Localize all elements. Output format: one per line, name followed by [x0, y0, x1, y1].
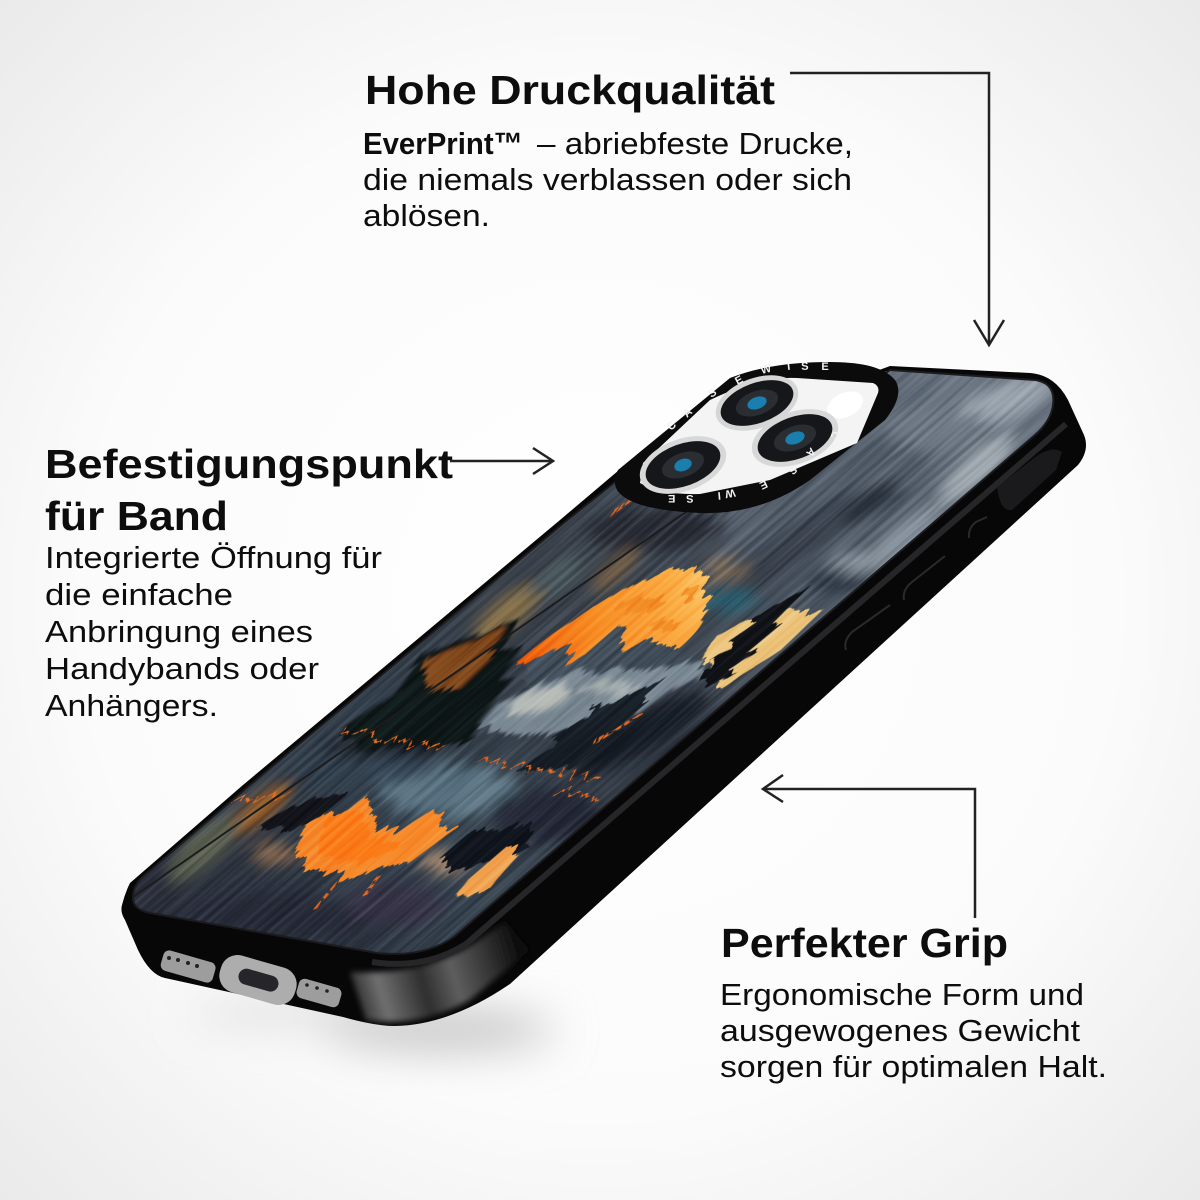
left speaker [159, 949, 217, 984]
heading: Befestigungspunkt für Band: Befestigungspunkt [45, 441, 453, 487]
side action button [969, 517, 987, 538]
glass insert [640, 378, 878, 494]
camera bump [615, 361, 898, 513]
arrow: to top of phone [790, 73, 1004, 345]
description: – abriebfeste Drucke, [537, 126, 853, 161]
heading: Perfekter Grip: Perfekter Grip [721, 920, 1008, 966]
side pad [997, 450, 1062, 510]
screen rim [133, 370, 1053, 954]
description: ausgewogenes Gewicht [720, 1013, 1080, 1048]
description [363, 126, 853, 233]
right speaker [295, 977, 343, 1009]
lens right [744, 398, 846, 478]
bump frame [615, 362, 898, 513]
arrow: to phone side [763, 775, 975, 918]
flash [823, 386, 867, 424]
description: Ergonomische Form und [720, 977, 1084, 1012]
description: sorgen für optimalen Halt. [720, 1049, 1107, 1084]
corner sheen [350, 424, 1066, 1022]
callout: strap attachment [45, 441, 453, 723]
case body [121, 366, 1086, 1026]
screen artwork: moon landscape [134, 370, 1052, 953]
description: die einfache [45, 577, 233, 612]
USB-C port [215, 951, 301, 1009]
heading: Befestigungspunkt für Band [45, 441, 453, 539]
brand text top: CASEWISE [665, 361, 829, 433]
description: Anhängers. [45, 688, 218, 723]
description: Integrierte Öffnung für [45, 540, 382, 575]
lens left [632, 425, 734, 505]
lens top [708, 365, 806, 441]
description: Handybands oder [45, 651, 319, 686]
arrow: to strap opening [450, 448, 553, 474]
heading: Befestigungspunkt für Band: für Band [45, 493, 228, 539]
description: die niemals verblassen oder sich [363, 162, 852, 197]
description [45, 540, 382, 723]
heading: Hohe Druckqualität: Hohe Druckqualität [365, 67, 775, 113]
description: ablösen. [363, 198, 490, 233]
brand text bottom: CASEWISE [668, 428, 842, 504]
description: EverPrint™ [363, 126, 523, 161]
phone case [121, 362, 1086, 1026]
description [720, 977, 1107, 1084]
volume down button [845, 605, 890, 650]
phone drop shadow [190, 1000, 555, 1050]
volume up button [904, 556, 945, 600]
description: Anbringung eines [45, 614, 313, 649]
callout: grip [720, 920, 1107, 1084]
callout: print quality [363, 67, 853, 233]
